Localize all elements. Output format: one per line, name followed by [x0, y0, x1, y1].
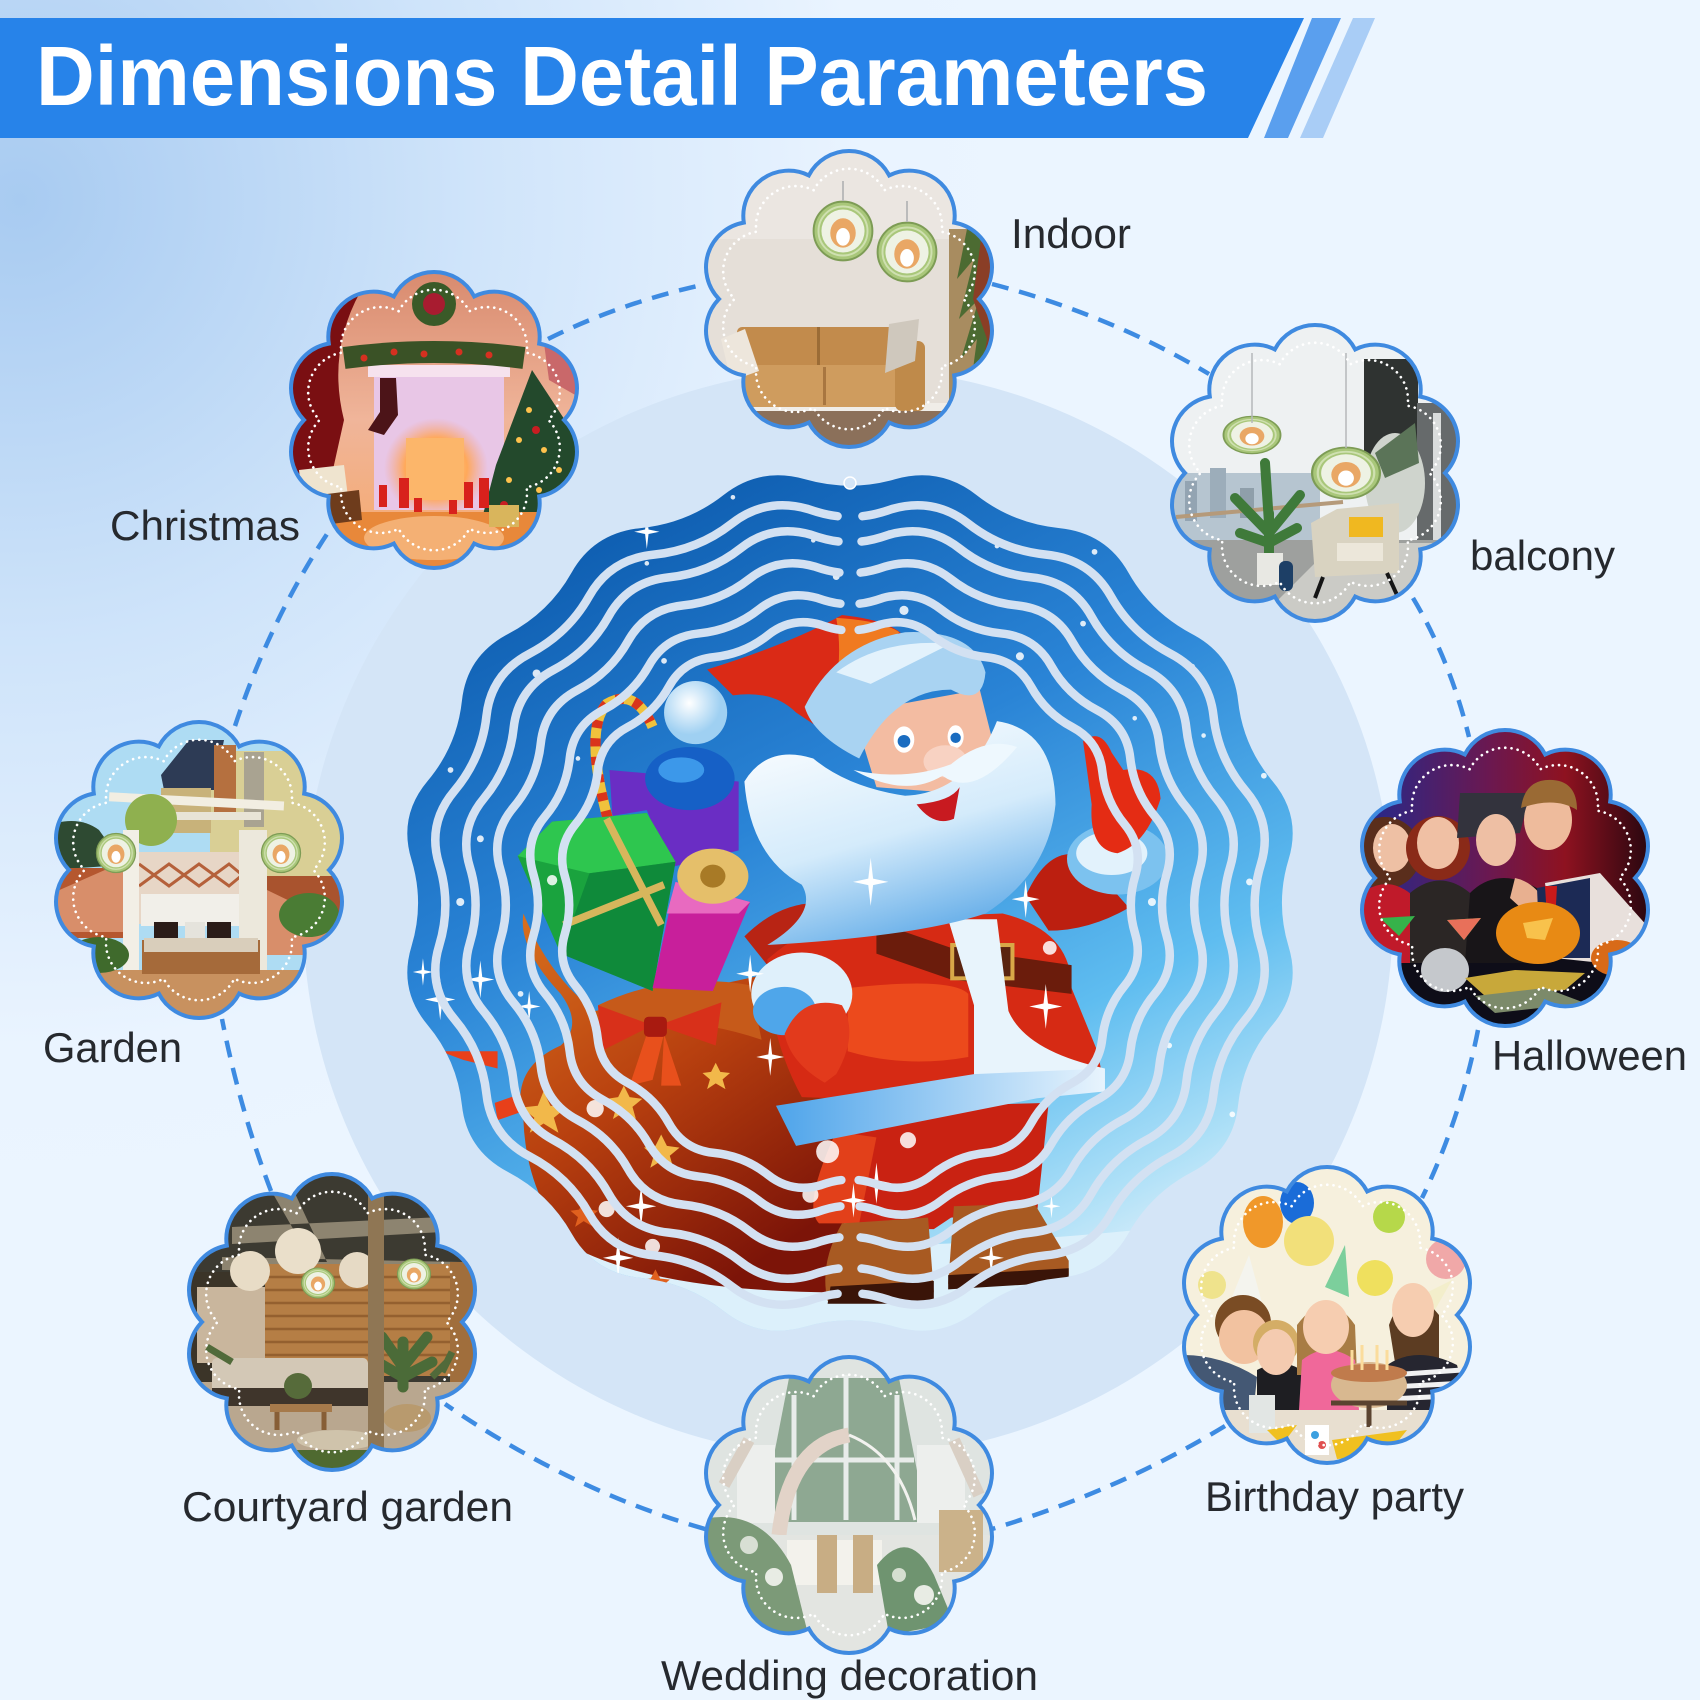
nose and moustache	[923, 745, 967, 777]
blue flower outline	[189, 1174, 475, 1470]
eyes	[894, 726, 914, 753]
panel: Wedding scene	[699, 1355, 999, 1655]
blue flower outline	[706, 1357, 992, 1653]
title: Dimensions Detail Parameters	[36, 29, 1208, 123]
magenta gift	[653, 882, 750, 991]
label: Halloween: Halloween	[1492, 1032, 1687, 1079]
red sack bow	[598, 1002, 721, 1086]
green gift	[518, 813, 676, 991]
dotted inner border	[723, 1375, 975, 1635]
photo: fireplace	[284, 270, 584, 572]
label: Garden: Garden	[43, 1024, 182, 1071]
boots	[825, 1218, 934, 1301]
label: balcony: balcony	[1470, 532, 1615, 579]
photo: kids party	[1177, 1165, 1477, 1465]
purple gift	[610, 770, 739, 868]
coat front trim	[948, 919, 1105, 1100]
gold bow	[677, 849, 748, 904]
blue bow	[645, 747, 735, 810]
blue flower outline	[1362, 730, 1648, 1026]
dashed connector arcs	[222, 284, 1478, 1529]
snowy ground	[566, 1224, 1130, 1331]
photo: patio	[182, 1172, 482, 1472]
panel: Courtyard garden scene	[182, 1172, 482, 1472]
left sleeve back	[744, 904, 806, 964]
label: Courtyard garden: Courtyard garden	[182, 1483, 513, 1530]
label: Indoor: Indoor	[1011, 210, 1131, 257]
panel: Garden scene	[49, 720, 349, 1020]
belt	[876, 932, 1072, 994]
panel: Indoor scene	[699, 149, 999, 451]
photo: pergola	[49, 720, 349, 1020]
raised cuff	[1067, 823, 1168, 895]
coat body	[767, 913, 1105, 1103]
dotted inner border	[1189, 343, 1441, 603]
mouth	[917, 787, 960, 821]
sparkles	[413, 515, 1062, 1279]
label: Christmas: Christmas	[110, 502, 300, 549]
dotted inner border	[723, 169, 975, 429]
raised mitten	[1083, 736, 1161, 853]
central pale circle backdrop	[303, 368, 1393, 1458]
lowered cuff	[751, 952, 852, 1014]
ribbon tail	[445, 1051, 520, 1120]
hanging hole	[844, 477, 856, 489]
panel: balcony scene	[1165, 323, 1465, 623]
spinner cut rings	[435, 505, 1265, 1305]
panel: Halloween scene	[1349, 728, 1655, 1028]
sack top	[598, 981, 762, 1040]
photo: wedding arch	[699, 1355, 999, 1655]
blue flower outline	[706, 151, 992, 447]
blue flower outline	[291, 272, 577, 568]
candy cane	[595, 699, 653, 819]
coat hem	[776, 1068, 1105, 1146]
wind spinner centerpiece	[407, 475, 1293, 1355]
beard	[744, 721, 1056, 945]
raised arm	[1026, 854, 1129, 931]
snow dots	[448, 495, 1267, 1254]
pompom	[664, 681, 727, 744]
blue flower outline	[1172, 325, 1458, 621]
face	[864, 690, 991, 792]
sack stars	[525, 1062, 730, 1282]
label: Birthday party: Birthday party	[1205, 1473, 1464, 1520]
dotted inner border	[73, 740, 325, 1000]
hat brim	[805, 632, 985, 758]
santa artwork	[413, 495, 1267, 1355]
panel: Birthday party scene	[1177, 1165, 1477, 1465]
blue flower outline	[1184, 1167, 1470, 1463]
photo: balcony	[1165, 323, 1465, 623]
dotted inner border	[308, 290, 560, 550]
legs	[842, 1103, 1049, 1229]
dotted inner border	[1201, 1185, 1453, 1445]
blue flower outline	[56, 722, 342, 1018]
header banner	[0, 18, 1375, 138]
dotted inner border	[206, 1192, 458, 1452]
label: Wedding decoration: Wedding decoration	[661, 1652, 1038, 1699]
photo: party	[1349, 728, 1655, 1028]
panel: Christmas scene	[284, 270, 584, 572]
lowered mitten	[785, 1003, 849, 1083]
spinner metal disc	[407, 475, 1293, 1331]
hat	[707, 615, 905, 724]
sack	[520, 913, 848, 1292]
dotted inner border	[1379, 748, 1631, 1008]
photo: living room	[699, 149, 999, 451]
